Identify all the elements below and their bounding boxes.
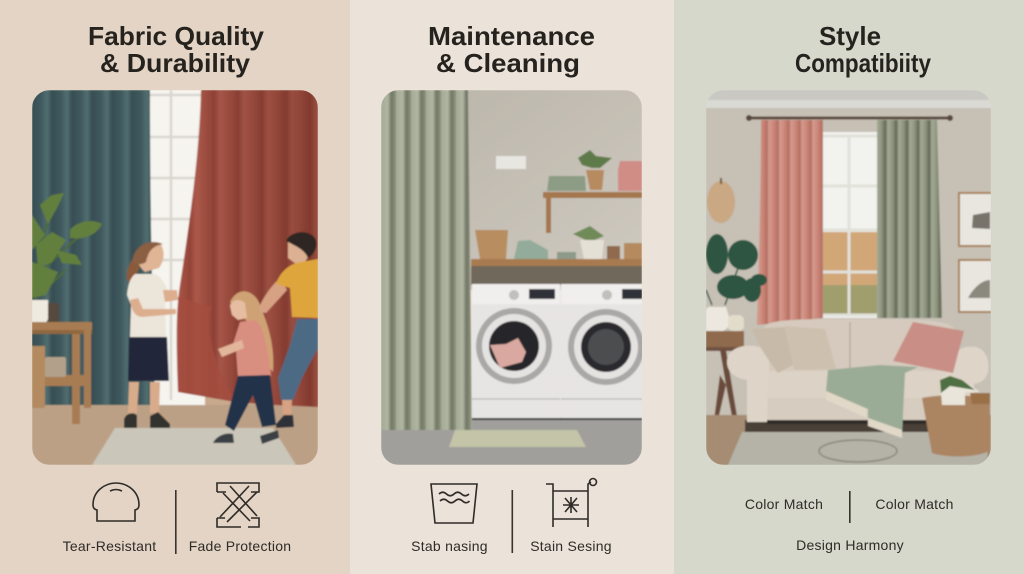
- label: fade protection: Fade Protection: [189, 538, 291, 554]
- upper potted plant: [578, 150, 612, 190]
- window: [150, 90, 205, 410]
- head: [286, 241, 308, 264]
- wall: [468, 90, 642, 290]
- wall sign: [496, 156, 526, 169]
- sofa: [727, 319, 988, 424]
- shoe: [276, 415, 294, 428]
- t-shirt: [127, 274, 170, 338]
- wicker wall lamp: [707, 178, 735, 223]
- pillows: [752, 322, 964, 373]
- hair: [286, 232, 316, 258]
- window: [823, 132, 877, 318]
- label: stain sesing: Stain Sesing: [530, 538, 612, 554]
- photo: living room: [706, 90, 991, 465]
- adult in yellow shirt: [260, 232, 318, 428]
- shadow under sofa: [745, 420, 945, 433]
- white vases: [706, 307, 744, 332]
- icon: wash basin: [431, 484, 477, 523]
- sofa back: [764, 319, 955, 380]
- label: color match left: Color Match: [745, 496, 823, 512]
- label: tear-resistant: Tear-Resistant: [63, 538, 156, 554]
- long hair: [230, 291, 273, 372]
- floor mat: [449, 430, 586, 447]
- head: [137, 242, 164, 272]
- divider: [849, 491, 851, 523]
- under shelf shadow: [471, 266, 642, 285]
- navy pants: [225, 375, 276, 431]
- ponytail: [127, 258, 140, 282]
- yellow shirt: [276, 259, 318, 318]
- sofa seat: [766, 371, 956, 401]
- little girl: [213, 291, 279, 444]
- label: color match right: Color Match: [875, 496, 954, 512]
- green throw blanket: [826, 365, 918, 438]
- lower shelf: [471, 259, 642, 266]
- label: stab nasing: Stab nasing: [411, 538, 488, 554]
- framed pictures: [958, 192, 991, 313]
- floor: [381, 418, 642, 465]
- basket on shelf: [45, 357, 66, 377]
- plant: [32, 193, 102, 300]
- ceiling: [706, 90, 991, 108]
- curtain rod: [746, 115, 953, 121]
- shoes: [213, 430, 279, 444]
- right arm: [940, 347, 988, 412]
- title: fabric quality: & Durability: [100, 48, 251, 78]
- divider: [175, 490, 177, 554]
- teal curtain: [32, 90, 155, 405]
- folded towel: [514, 240, 548, 259]
- arm: [260, 278, 287, 313]
- panel background: [350, 0, 674, 574]
- pink curtain: [757, 120, 823, 325]
- shoes: [124, 412, 170, 428]
- wooden table: [32, 322, 92, 424]
- face: [230, 300, 247, 320]
- sofa base: [766, 398, 936, 420]
- pink towels: [618, 161, 642, 191]
- wicker bucket: [475, 230, 508, 259]
- title: style compatibility: Style: [819, 21, 881, 51]
- pot: [32, 300, 49, 324]
- panel: style compatibility: [674, 0, 1024, 574]
- arm: [218, 340, 244, 357]
- photo: laundry room: [381, 90, 644, 465]
- hair: [132, 242, 163, 264]
- green curtain: [877, 120, 942, 318]
- woven basket: [922, 395, 990, 456]
- red curtain: [177, 90, 318, 407]
- towels green: [547, 176, 586, 191]
- title: fabric quality: Fabric Quality: [88, 21, 265, 51]
- photo frame on table: [48, 303, 59, 322]
- rug: [728, 432, 988, 465]
- shorts: [128, 337, 169, 381]
- left washer: [472, 284, 560, 418]
- title: maintenance: Maintenance: [428, 21, 595, 51]
- floor: [706, 415, 991, 465]
- arms: [130, 290, 178, 317]
- label: design harmony: Design Harmony: [796, 537, 904, 553]
- right washer: [561, 284, 644, 418]
- wall: [706, 90, 991, 435]
- title: maintenance: & Cleaning: [436, 48, 580, 78]
- washer base line: [472, 418, 642, 420]
- basket plant: [940, 376, 990, 405]
- floor: [32, 405, 318, 465]
- title: style compatibility: Compatibiity: [795, 48, 931, 78]
- upper shelf: [543, 192, 642, 233]
- laundry in drum: [490, 338, 526, 368]
- monstera plant: [706, 234, 767, 305]
- sage curtain: [381, 90, 472, 430]
- jeans: [278, 319, 318, 400]
- icon: fade protection: [217, 483, 259, 527]
- divider: [512, 490, 513, 553]
- standing girl: [124, 242, 178, 428]
- icon: tear-resistant helmet: [93, 483, 139, 521]
- rug: [92, 428, 296, 465]
- panel background: [674, 0, 1024, 574]
- lower plants and jars: [557, 226, 642, 259]
- panel background: [0, 0, 350, 574]
- icon: stain care: [546, 478, 596, 527]
- panel: fabric quality and durability: [0, 0, 350, 574]
- photo: family pulling a curtain: [32, 90, 318, 465]
- panel: maintenance and cleaning: [381, 26, 642, 554]
- side table: [706, 331, 744, 422]
- legs: [128, 382, 160, 413]
- pink shirt: [233, 320, 271, 378]
- rug medallion: [819, 440, 897, 462]
- left arm: [727, 346, 769, 422]
- ankle: [282, 400, 292, 416]
